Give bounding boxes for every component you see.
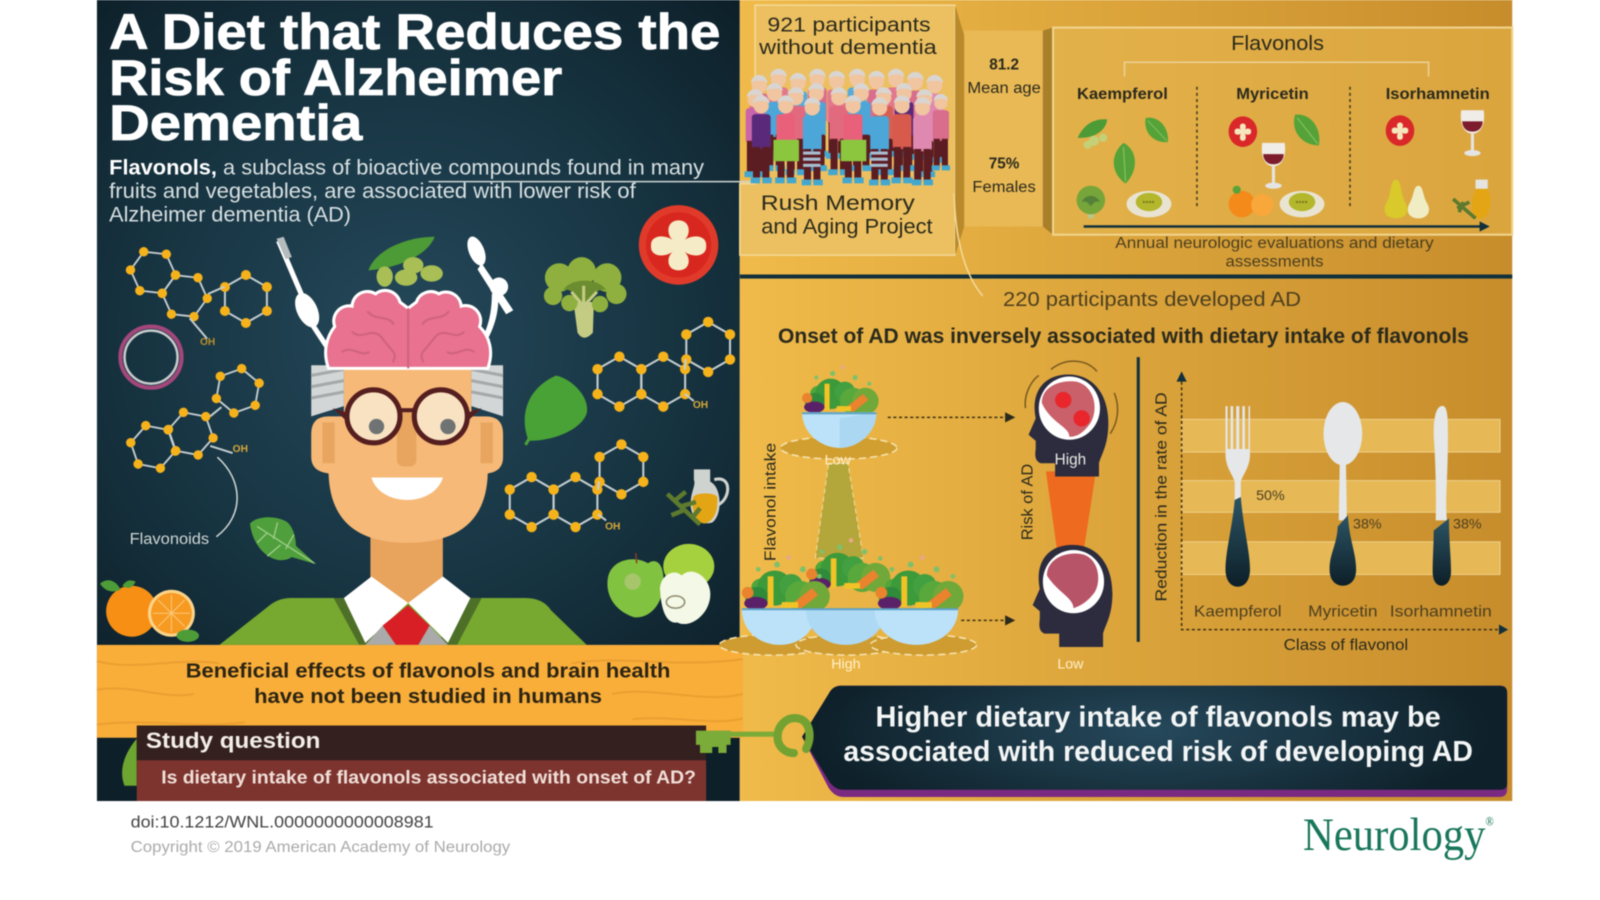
- flavonols heading: Flavonols: [1231, 33, 1324, 55]
- females: [972, 155, 1036, 196]
- neck: [370, 536, 443, 604]
- low intake bowl: [781, 365, 897, 459]
- high intake bowls: [719, 538, 977, 655]
- connector line to study panel: [429, 181, 755, 183]
- molecule: mid left: OH: [233, 444, 248, 455]
- molecule: top left: [117, 236, 272, 348]
- plank text: have not been studied in humans: [254, 686, 602, 708]
- participants heading: 921 participants: [767, 15, 931, 37]
- panel: flavonols: [1053, 28, 1512, 235]
- footer: doi: doi:10.1212/WNL.0000000000008981: [131, 814, 434, 832]
- dotted arrows: [888, 412, 1015, 626]
- x axis label: Class of flavonol: [1284, 637, 1408, 654]
- icon: broccoli: [544, 257, 627, 338]
- timeline arrow: [1084, 221, 1490, 232]
- project name: Rush Memory: [761, 191, 915, 215]
- high risk head: [1025, 361, 1118, 477]
- spoon bar: [1323, 402, 1362, 586]
- divider line: [740, 274, 1512, 279]
- title: Dementia: [109, 95, 364, 151]
- caption: annual evaluations: assessments: [1226, 253, 1324, 270]
- icon: oranges: [100, 580, 199, 642]
- chart: risk of AD: [1020, 361, 1118, 672]
- kaempferol foods: [1077, 112, 1174, 218]
- face: [311, 366, 503, 543]
- low label: Low: [825, 452, 852, 468]
- molecule: top left: OH: [200, 337, 215, 348]
- icon: tomato: [639, 205, 718, 285]
- vertical divider: [1137, 357, 1140, 642]
- connector curve: [954, 194, 983, 296]
- risk wedge: [1046, 471, 1096, 551]
- category labels: [1194, 603, 1492, 620]
- sweater stripe: [334, 598, 482, 645]
- conclusion banner: [802, 686, 1507, 797]
- axis label risk of AD: Risk of AD: [1020, 464, 1037, 540]
- fork bar: [1226, 406, 1250, 587]
- axis label flavonol intake: Flavonol intake: [763, 443, 780, 561]
- panel: dark left background: [97, 0, 740, 801]
- footer: journal logo: Neurology: [1303, 809, 1504, 861]
- study question heading: Study question: [146, 728, 320, 753]
- bracket: [1124, 62, 1429, 77]
- icon: oil jug: [667, 469, 728, 524]
- title: Risk of Alzheimer: [109, 50, 562, 106]
- intro text: fruits and vegetables, are associated with lower risk of: [109, 179, 636, 203]
- icon: spoon: [464, 234, 513, 343]
- caption: annual evaluations: [1115, 235, 1434, 270]
- intro text: [109, 155, 704, 226]
- mean age: Mean age: [967, 80, 1041, 97]
- title: A Diet that Reduces the: [109, 4, 720, 60]
- intro text: Alzheimer dementia (AD): [109, 202, 351, 226]
- plank text: [186, 661, 670, 708]
- percent labels: [1256, 488, 1482, 533]
- intro text: Flavonols, a subclass of bioactive compounds found in many: [109, 155, 704, 179]
- study question text: Is dietary intake of flavonols associated with onset of AD?: [161, 767, 696, 788]
- conclusion text: associated with reduced risk of developing AD: [843, 736, 1473, 768]
- plank text: Beneficial effects of flavonols and brain health: [186, 661, 670, 683]
- percent labels: 38%: [1453, 517, 1482, 533]
- category labels: Isorhamnetin: [1390, 603, 1492, 620]
- footer: journal logo: ®: [1485, 815, 1494, 829]
- column headings: Isorhamnetin: [1386, 86, 1490, 103]
- brain: [326, 290, 491, 368]
- participants heading: without dementia: [758, 37, 937, 59]
- study question box: [122, 726, 706, 801]
- females: 75%: [989, 155, 1020, 172]
- molecule: right lower: OH: [605, 522, 620, 533]
- percent labels: 50%: [1256, 488, 1285, 504]
- knife bar: [1433, 406, 1451, 586]
- isorhamnetin foods: [1385, 110, 1490, 218]
- chart: flavonol intake salads: [719, 365, 1015, 672]
- hair: [311, 365, 503, 416]
- collar: [344, 577, 470, 643]
- ring: [120, 327, 182, 388]
- molecule: mid left: [121, 360, 267, 481]
- mouth: [371, 478, 443, 500]
- label: flavonoids with curve: Flavonoids: [130, 531, 210, 548]
- icon: fork: [277, 237, 338, 363]
- mean age: [967, 56, 1041, 97]
- result: participants developed AD: 220 participants developed AD: [1003, 289, 1301, 311]
- bands: [1182, 419, 1500, 574]
- label: flavonoids with curve: [130, 457, 237, 548]
- low risk head: [1033, 545, 1112, 647]
- sweater: [219, 598, 587, 645]
- icon: apples: [607, 544, 714, 624]
- molecule: right lower: [505, 439, 648, 533]
- column headings: Kaempferol: [1077, 86, 1168, 103]
- icon: spinach leaf: [525, 376, 587, 445]
- low label: Low: [1057, 656, 1084, 672]
- project name: [761, 191, 933, 239]
- character: man with brain: [219, 290, 587, 645]
- conclusion text: [843, 702, 1473, 768]
- title: [109, 4, 720, 151]
- panel: gold right background: [740, 0, 1512, 801]
- high label: High: [831, 656, 861, 672]
- axes: [1177, 371, 1508, 635]
- panel: demographics: [964, 28, 1053, 235]
- ears: [322, 422, 493, 463]
- glasses: [333, 390, 482, 443]
- chairs: [803, 153, 888, 165]
- heading: onset of AD: Onset of AD was inversely associated with dietary intake of flavonols: [778, 325, 1469, 348]
- project name: and Aging Project: [761, 215, 933, 239]
- high risk head: High: [1055, 451, 1086, 468]
- molecule: right upper: [592, 317, 735, 412]
- footer: copyright: Copyright © 2019 American Academy of Neurology: [131, 839, 511, 856]
- myricetin foods: [1229, 108, 1326, 217]
- icon: pea pod: [368, 237, 443, 287]
- females: Females: [972, 179, 1036, 196]
- participants heading: [758, 15, 937, 59]
- conclusion text: Higher dietary intake of flavonols may be: [876, 702, 1441, 734]
- low intake beam: [815, 463, 863, 558]
- nose: [397, 410, 416, 466]
- column headings: [1077, 86, 1490, 103]
- y axis label: Reduction in the rate of AD: [1153, 392, 1170, 602]
- molecule: right upper: OH: [693, 400, 708, 411]
- aprons: [773, 140, 799, 161]
- panel: participants: [740, 5, 964, 255]
- caption: annual evaluations: Annual neurologic evaluations and dietary: [1115, 235, 1434, 252]
- icon: mint leaf: [250, 517, 316, 564]
- percent labels: 38%: [1353, 517, 1382, 533]
- plank: [97, 645, 743, 738]
- crowd illustration: [745, 69, 950, 185]
- icon: key: [696, 718, 809, 753]
- mean age: 81.2: [989, 56, 1019, 73]
- tie: [365, 626, 448, 645]
- chart: reduction in rate of AD: [1153, 371, 1508, 654]
- category labels: Myricetin: [1308, 603, 1378, 620]
- column headings: Myricetin: [1236, 86, 1309, 103]
- category labels: Kaempferol: [1194, 603, 1282, 620]
